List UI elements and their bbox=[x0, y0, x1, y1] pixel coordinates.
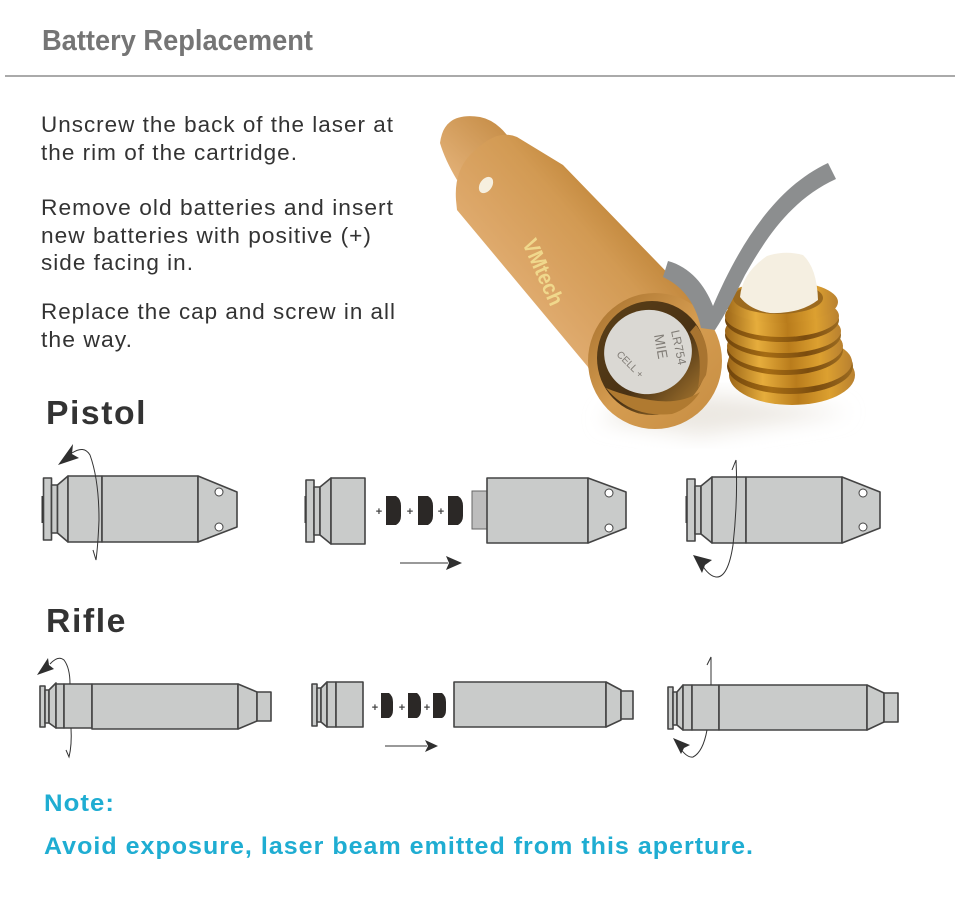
rotation arrow bbox=[37, 658, 71, 757]
batteries bbox=[376, 496, 463, 525]
pistol diagram: screw back bbox=[686, 460, 880, 577]
check mark bbox=[663, 163, 836, 330]
rifle diagram: insert batteries bbox=[312, 682, 633, 752]
cartridge neck bbox=[440, 116, 507, 180]
battery: CELL + bbox=[614, 349, 645, 381]
white insert bbox=[740, 253, 818, 313]
batteries: + bbox=[407, 506, 413, 518]
rifle diagram: unscrew bbox=[37, 658, 271, 757]
battery bbox=[595, 300, 701, 404]
batteries bbox=[372, 693, 446, 718]
shadow under cartridge bbox=[600, 395, 850, 436]
cartridge body bbox=[456, 135, 716, 392]
rotation arrow bbox=[58, 444, 99, 560]
threaded cap bbox=[724, 253, 855, 405]
instructions text block bbox=[41, 112, 396, 352]
instructions text block: side facing in. bbox=[41, 250, 194, 275]
photo: opened brass laser cartridge with battery bbox=[440, 116, 855, 436]
direction arrow bbox=[400, 556, 462, 570]
instructions text block: Remove old batteries and insert bbox=[41, 195, 394, 220]
batteries: + bbox=[399, 702, 405, 714]
battery: LR754 bbox=[668, 329, 689, 367]
brand mark: VMtech bbox=[517, 235, 568, 309]
battery: MIE bbox=[651, 333, 671, 360]
note text: Avoid exposure, laser beam emitted from this aperture. bbox=[44, 833, 754, 860]
title: Battery Replacement bbox=[42, 25, 313, 57]
rotation arrow bbox=[693, 460, 737, 577]
heading: Pistol: Pistol bbox=[46, 394, 147, 431]
note heading: Note: bbox=[44, 790, 115, 817]
rifle diagram: screw back bbox=[668, 657, 898, 757]
batteries: + bbox=[424, 702, 430, 714]
cartridge rim bbox=[588, 293, 722, 429]
instructions text block: the rim of the cartridge. bbox=[41, 140, 298, 165]
batteries: + bbox=[438, 506, 444, 518]
aperture bbox=[476, 174, 496, 196]
pistol diagram: unscrew bbox=[42, 444, 237, 560]
pistol diagram: insert batteries bbox=[304, 478, 626, 570]
instructions text block: new batteries with positive (+) bbox=[41, 223, 372, 248]
direction arrow bbox=[385, 740, 438, 752]
heading: Rifle: Rifle bbox=[46, 602, 127, 639]
batteries: + bbox=[376, 506, 382, 518]
rotation arrow bbox=[673, 657, 711, 757]
instructions text block: the way. bbox=[41, 327, 133, 352]
instructions text block: Replace the cap and screw in all bbox=[41, 299, 396, 324]
batteries: + bbox=[372, 702, 378, 714]
instructions text block: Unscrew the back of the laser at bbox=[41, 112, 394, 137]
